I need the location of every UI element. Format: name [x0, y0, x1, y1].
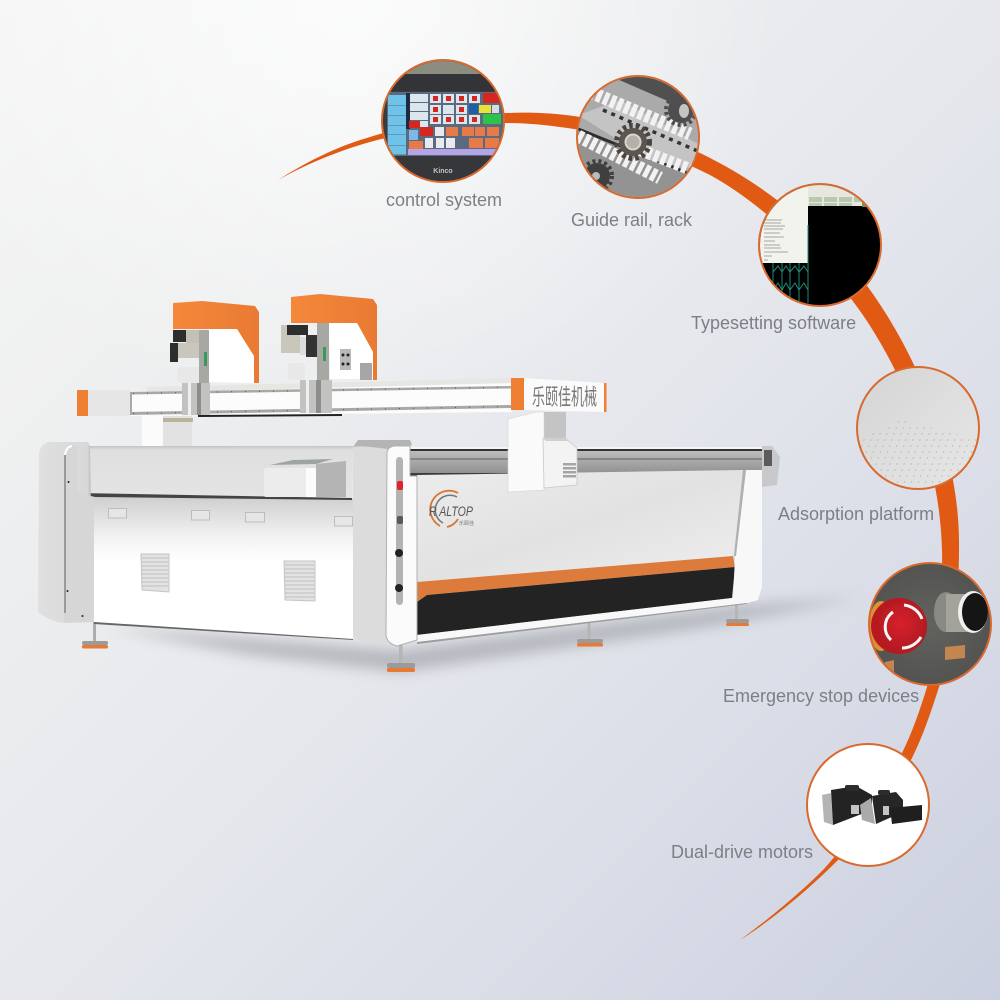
- circle: typesetting software: [758, 184, 882, 306]
- motor left: [822, 785, 872, 825]
- label: emergency stop devices: Emergency stop devices: [723, 686, 919, 706]
- cutting head left: [170, 301, 259, 415]
- rack teeth lower: [578, 136, 660, 178]
- vent left: [141, 554, 169, 592]
- cutting machine: [38, 294, 860, 672]
- right corner post: [353, 440, 417, 646]
- rack teeth upper: [590, 92, 690, 134]
- front top bar: [77, 446, 353, 498]
- black panel: [417, 567, 735, 635]
- circle: emergency stop: [869, 563, 991, 685]
- brand logo: 乐颐佳: [459, 520, 474, 527]
- circle: control system: [380, 58, 506, 186]
- control box: [264, 459, 346, 497]
- gantry nameplate: 乐颐佳机械: [532, 384, 597, 410]
- floor shadow: [110, 598, 860, 672]
- label: control system: control system: [386, 190, 502, 210]
- cutting head right: [281, 294, 377, 413]
- brand logo: [429, 491, 474, 527]
- label: dual-drive motors: Dual-drive motors: [671, 842, 813, 862]
- circle: guide rail and rack: [576, 76, 700, 200]
- motor right: [860, 790, 903, 824]
- center gear: [617, 126, 649, 158]
- label: adsorption platform: Adsorption platform: [778, 504, 934, 524]
- brand logo: R ALTOP: [429, 503, 474, 519]
- left end cap: [38, 442, 94, 623]
- gantry left support: [142, 416, 193, 446]
- socket panel: [340, 349, 351, 370]
- drive box: [890, 805, 922, 824]
- orange connecting arc: [278, 113, 959, 940]
- orange tags: [885, 645, 965, 674]
- white control strip: [386, 446, 417, 646]
- label: typesetting software: Typesetting software: [691, 313, 856, 333]
- circle: control system: Kinco: [433, 168, 453, 175]
- gantry nameplate: [511, 378, 606, 412]
- rear rail section: [410, 446, 780, 487]
- touch screen: [387, 92, 503, 156]
- lower gear: [582, 161, 612, 191]
- front lower panel: [77, 493, 353, 640]
- gantry beam: [77, 378, 512, 417]
- gantry right support: [508, 412, 577, 492]
- circle: dual-drive motors: [807, 744, 929, 866]
- orange band: [417, 556, 735, 602]
- feet: [82, 603, 749, 672]
- red mushroom button: [869, 598, 927, 654]
- nesting pattern: [773, 225, 808, 303]
- label: guide rail, rack: Guide rail, rack: [571, 210, 693, 230]
- upper gear: [666, 95, 696, 125]
- vent right: [284, 561, 315, 601]
- circle: adsorption platform: [857, 367, 980, 490]
- selector switch: [934, 591, 988, 633]
- right side panel: [417, 470, 762, 644]
- context menu: [758, 184, 808, 263]
